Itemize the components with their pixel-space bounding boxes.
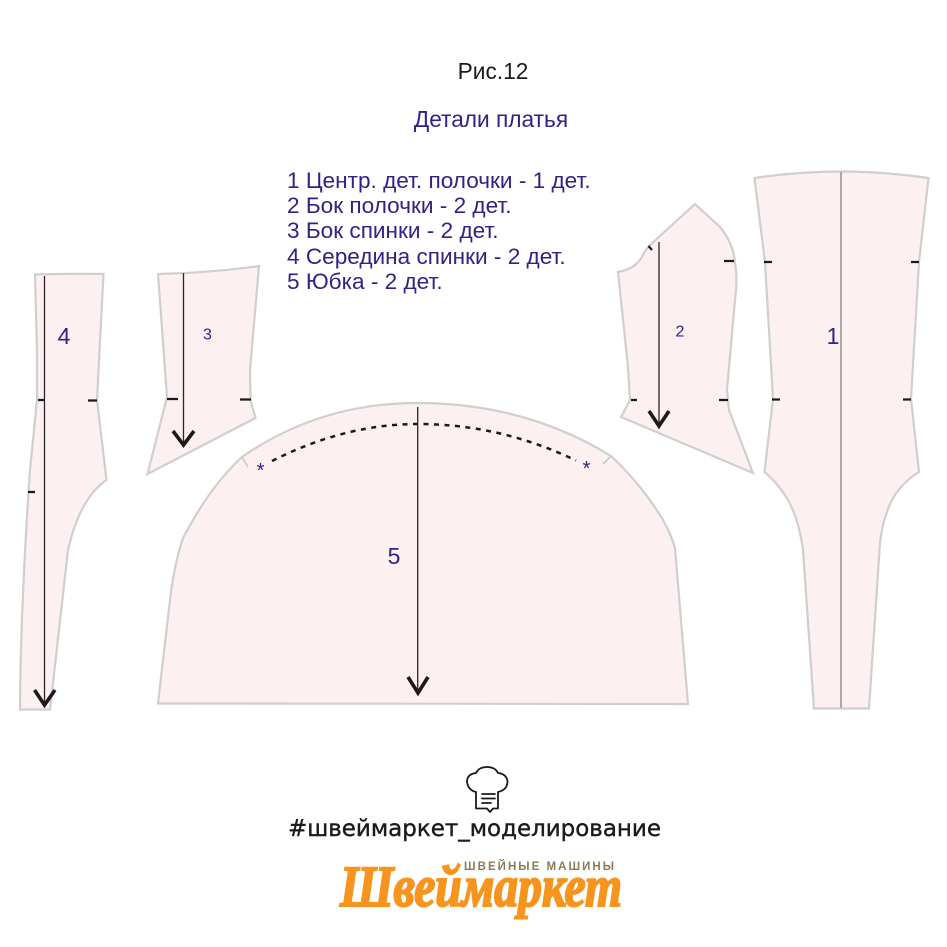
pattern piece 5: skirt: * bbox=[583, 458, 591, 480]
parts list bbox=[287, 168, 591, 294]
icon: chef hat with note bbox=[467, 767, 508, 812]
parts list: 3 Бок спинки - 2 дет. bbox=[287, 218, 499, 243]
hashtag: #швеймаркет_моделирование bbox=[288, 816, 661, 842]
pattern piece 2: front side bbox=[618, 204, 753, 473]
pattern piece 3: back side: 3 bbox=[203, 326, 212, 344]
parts list: 4 Середина спинки - 2 дет. bbox=[287, 244, 566, 269]
parts list: 1 Центр. дет. полочки - 1 дет. bbox=[287, 168, 591, 193]
pattern piece 5: skirt: * bbox=[257, 460, 265, 482]
title: dress parts: Детали платья bbox=[414, 106, 568, 132]
figure number: Рис.12 bbox=[458, 58, 528, 84]
parts list: 5 Юбка - 2 дет. bbox=[287, 269, 443, 294]
pattern piece 1: front centre: 1 bbox=[827, 323, 839, 349]
parts list: 2 Бок полочки - 2 дет. bbox=[287, 193, 512, 218]
logo: Швеймаркет: Швеймаркет bbox=[339, 854, 622, 919]
pattern piece 4: back centre bbox=[20, 274, 106, 710]
pattern piece 5: skirt bbox=[158, 403, 688, 704]
pattern piece 5: skirt: 5 bbox=[388, 543, 400, 569]
logo: Швеймаркет: ШВЕЙНЫЕ МАШИНЫ bbox=[464, 860, 614, 873]
pattern piece 1: front centre bbox=[754, 172, 928, 708]
pattern piece 4: back centre: 4 bbox=[58, 323, 71, 349]
pattern piece 2: front side: 2 bbox=[676, 324, 685, 340]
pattern piece 3: back side bbox=[148, 266, 259, 474]
